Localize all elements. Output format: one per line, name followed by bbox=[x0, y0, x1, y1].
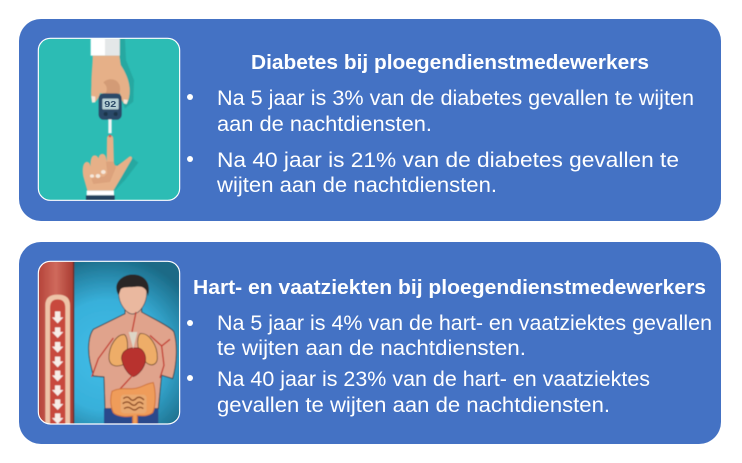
panel: cardiovascular bbox=[19, 242, 721, 444]
bullet list: cardiovascular bbox=[187, 312, 712, 417]
bullet list: diabetes: Na 40 jaar is 21% van de diabetes gevallen te bbox=[217, 149, 679, 172]
bullet list: cardiovascular: Na 5 jaar is 4% van de hart- en vaatziektes gevallen bbox=[217, 312, 712, 335]
heading: diabetes: Diabetes bij ploegendienstmedewerkers bbox=[251, 52, 649, 74]
icon: hands with blood glucose meter: 92 bbox=[104, 100, 117, 109]
bullet list: diabetes: Na 5 jaar is 3% van de diabetes gevallen te wijten bbox=[217, 87, 694, 110]
icon: human torso with blood vessel bbox=[38, 261, 180, 425]
heading: cardiovascular: Hart- en vaatziekten bij ploegendienstmedewerkers bbox=[193, 277, 706, 299]
bullet list: cardiovascular: te wijten aan de nachtdiensten. bbox=[217, 337, 526, 360]
bullet list: cardiovascular: gevallen te wijten aan de nachtdiensten. bbox=[217, 394, 610, 417]
bullet list: diabetes bbox=[187, 87, 694, 197]
panel: diabetes bbox=[19, 19, 721, 221]
icon: hands with blood glucose meter bbox=[38, 38, 180, 201]
bullet list: cardiovascular: Na 40 jaar is 23% van de hart- en vaatziektes bbox=[217, 368, 650, 391]
bullet list: diabetes: wijten aan de nachtdiensten. bbox=[216, 174, 497, 197]
bullet list: diabetes: aan de nachtdiensten. bbox=[217, 113, 432, 136]
